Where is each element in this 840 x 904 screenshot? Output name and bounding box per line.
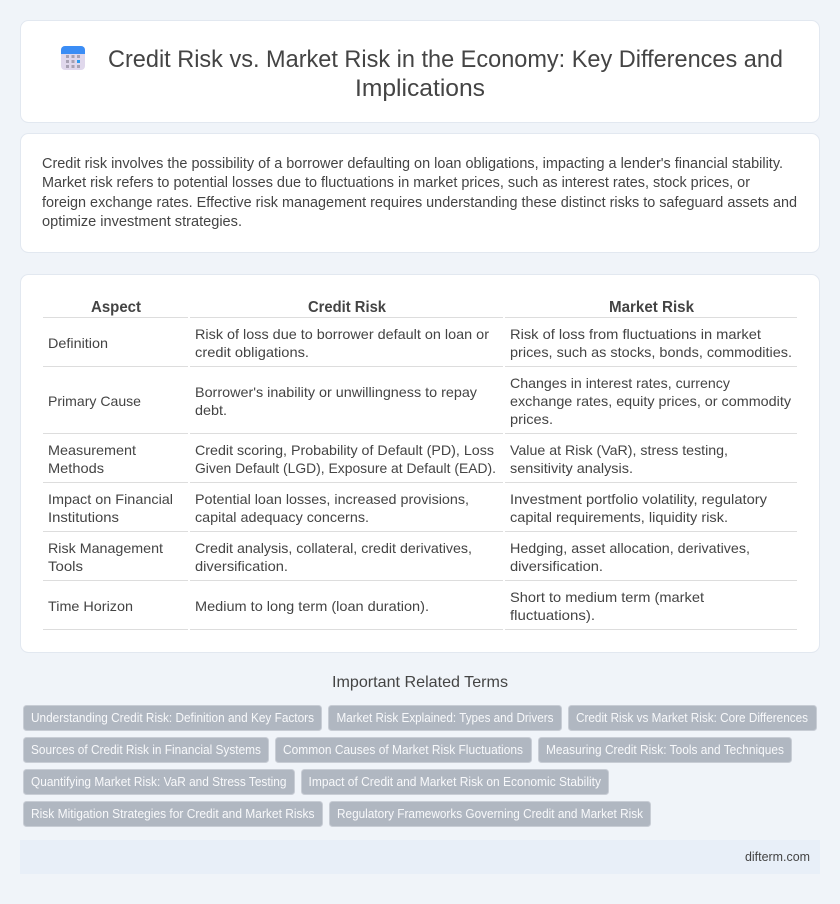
text block: intro xyxy=(42,156,797,230)
table row: impact on financial institutions: capital adequacy concerns. xyxy=(195,509,369,525)
table row: impact on financial institutions: Institutions xyxy=(48,509,119,525)
related term tags: Risk Mitigation Strategies for Credit and Market Risks xyxy=(31,807,314,821)
table row: definition: Risk of loss from fluctuations in market xyxy=(510,326,761,342)
related term tags: Common Causes of Market Risk Fluctuations xyxy=(283,743,523,757)
table row: risk management tools: Risk Management xyxy=(48,540,163,556)
table row: definition xyxy=(43,326,797,367)
table row: time horizon: fluctuations). xyxy=(510,607,595,623)
table row: measurement methods: Given Default (LGD), Exposure at Default (EAD). xyxy=(195,460,496,476)
table row: risk management tools: diversification. xyxy=(195,558,288,574)
table row: risk management tools: Tools xyxy=(48,558,83,574)
table row: primary cause: prices. xyxy=(510,411,553,427)
table row: measurement methods xyxy=(43,442,797,483)
table row: impact on financial institutions: capital requirements, liquidity risk. xyxy=(510,509,728,525)
table header xyxy=(43,299,797,318)
related term tags: Sources of Credit Risk in Financial Systems xyxy=(31,743,261,757)
table row: measurement methods: Methods xyxy=(48,460,104,476)
table row: risk management tools xyxy=(43,540,797,581)
table row: risk management tools: diversification. xyxy=(510,558,603,574)
table row: risk management tools: Credit analysis, collateral, credit derivatives, xyxy=(195,540,472,556)
panel: intro paragraph xyxy=(20,134,820,252)
table row: impact on financial institutions: Investment portfolio volatility, regulatory xyxy=(510,491,767,507)
table row: measurement methods: Value at Risk (VaR), stress testing, xyxy=(510,442,728,458)
related term tags: Regulatory Frameworks Governing Credit and Market Risk xyxy=(337,807,644,821)
table row: measurement methods: Credit scoring, Probability of Default (PD), Loss xyxy=(195,442,494,458)
table row: primary cause: exchange rates, equity prices, or commodity xyxy=(510,393,791,409)
table row: primary cause: Changes in interest rates, currency xyxy=(510,375,730,391)
table row: time horizon: Medium to long term (loan duration). xyxy=(195,598,429,614)
related term tags: Quantifying Market Risk: VaR and Stress Testing xyxy=(31,775,287,789)
title xyxy=(108,46,783,102)
panel: comparison table xyxy=(20,274,820,652)
table row: time horizon: Time Horizon xyxy=(48,598,133,614)
table row: primary cause: debt. xyxy=(195,402,227,418)
table row: impact on financial institutions: Potential loan losses, increased provisions, xyxy=(195,491,469,507)
related term tags: Impact of Credit and Market Risk on Economic Stability xyxy=(308,775,602,789)
related term tags: Measuring Credit Risk: Tools and Techniques xyxy=(546,743,784,757)
text block: intro: optimize investment strategies. xyxy=(42,214,242,230)
table row: time horizon: Short to medium term (market xyxy=(510,589,704,605)
table row: definition: Risk of loss due to borrower default on loan or xyxy=(195,326,489,342)
related term tags: Understanding Credit Risk: Definition and Key Factors xyxy=(31,711,314,725)
footer bar xyxy=(20,840,820,874)
table row: impact on financial institutions xyxy=(43,491,797,532)
table row: definition: credit obligations. xyxy=(195,344,309,360)
related term tags: Market Risk Explained: Types and Drivers xyxy=(336,711,554,725)
text block: intro: Credit risk involves the possibility of a borrower defaulting on loan obligations, impacting a lender's financial stability. xyxy=(42,156,783,172)
table row: primary cause: Primary Cause xyxy=(48,393,141,409)
table header: Market Risk xyxy=(609,299,694,316)
table header: Aspect xyxy=(91,299,142,316)
table row: time horizon xyxy=(43,589,797,630)
panel: title card xyxy=(20,20,820,122)
title: Implications xyxy=(355,75,485,102)
related term tags xyxy=(24,706,816,826)
text block: intro: foreign exchange rates. Effective risk management requires understanding these distinct risks to safeguard assets and xyxy=(42,195,797,211)
title: Credit Risk vs. Market Risk in the Economy: Key Differences and xyxy=(108,46,783,73)
table header: Credit Risk xyxy=(308,299,386,316)
table row: definition: Definition xyxy=(48,335,108,351)
text block: intro: Market risk refers to potential losses due to fluctuations in market prices, such as interest rates, stock prices, or xyxy=(42,175,750,191)
table row: impact on financial institutions: Impact on Financial xyxy=(48,491,173,507)
related term tags: Credit Risk vs Market Risk: Core Differences xyxy=(576,711,808,725)
icon: calendar xyxy=(61,46,85,70)
table row: measurement methods: Measurement xyxy=(48,442,136,458)
footer source text: difterm.com xyxy=(745,849,810,864)
table row: risk management tools: Hedging, asset allocation, derivatives, xyxy=(510,540,750,556)
table row: primary cause: Borrower's inability or unwillingness to repay xyxy=(195,384,477,400)
table row: primary cause xyxy=(43,375,797,434)
heading: related terms: Important Related Terms xyxy=(332,674,508,691)
table row: definition: prices, such as stocks, bonds, commodities. xyxy=(510,344,792,360)
table row: measurement methods: sensitivity analysis. xyxy=(510,460,633,476)
